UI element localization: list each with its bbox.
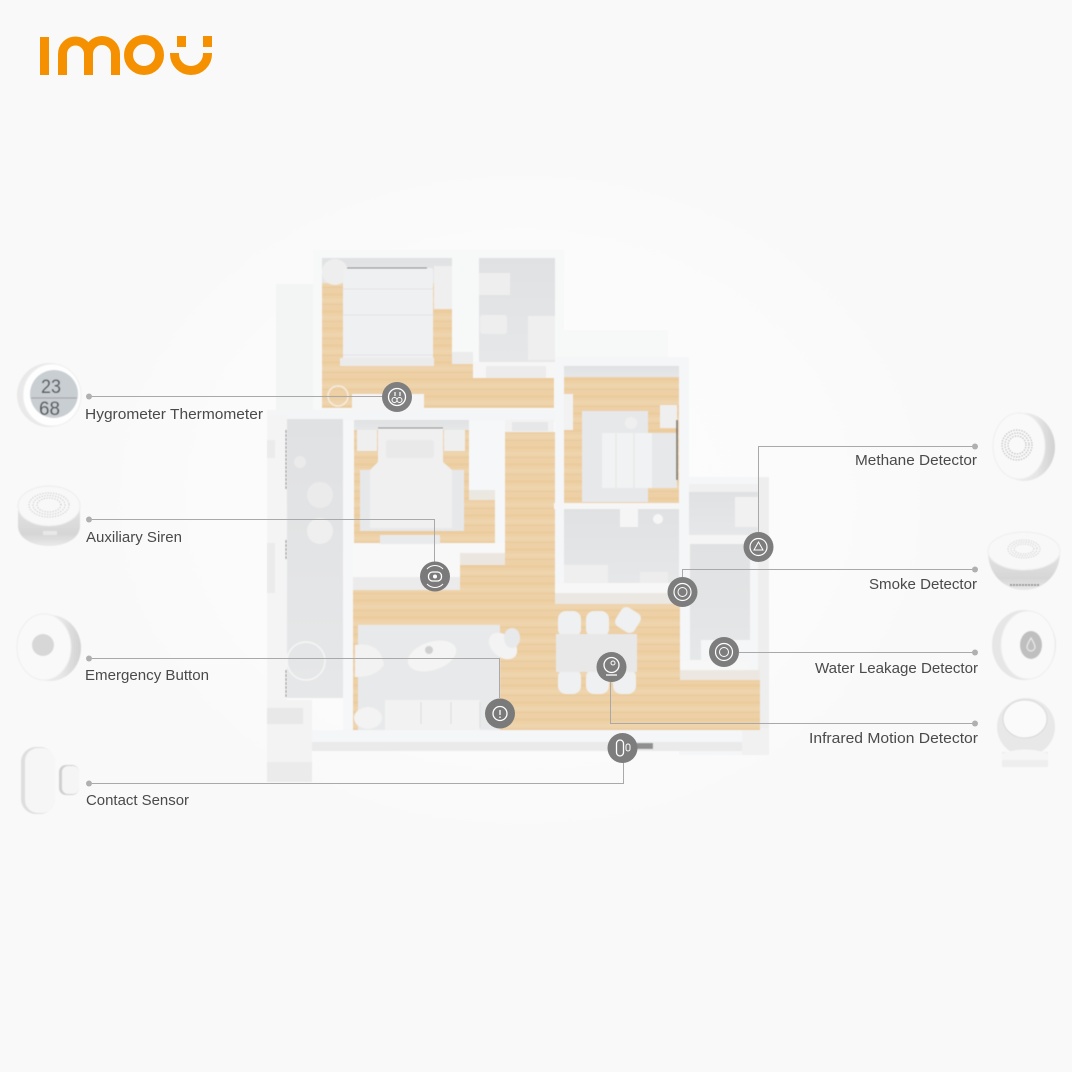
- map marker: infrared motion detector: [596, 652, 626, 682]
- temperature reading: 23: [41, 377, 61, 398]
- map marker: contact sensor: [608, 733, 638, 763]
- map marker: methane detector: [744, 532, 774, 562]
- label: methane detector: Methane Detector: [855, 452, 977, 469]
- map marker: smoke detector: [668, 577, 698, 607]
- gray rooms: [287, 258, 758, 698]
- label: infrared motion detector: Infrared Motion Detector: [809, 730, 978, 747]
- walls and structure: [267, 250, 769, 782]
- device: auxiliary siren: [18, 486, 80, 546]
- label: hygrometer thermometer: Hygrometer Thermometer: [85, 406, 263, 423]
- connector end dots: [86, 394, 978, 786]
- dining table and chairs: [556, 605, 643, 694]
- device: smoke detector: [988, 532, 1060, 590]
- living room furniture: [354, 625, 522, 730]
- device: methane detector: [993, 413, 1055, 481]
- logo: imou: [44, 36, 208, 75]
- connector lines: [88, 396, 975, 784]
- map marker: hygrometer thermometer: [382, 382, 412, 412]
- bedroom three furniture: [564, 394, 677, 502]
- room shading and counters: [352, 316, 760, 680]
- label: emergency button: Emergency Button: [85, 667, 209, 684]
- label: auxiliary siren: Auxiliary Siren: [86, 529, 182, 546]
- floor plan: [267, 250, 769, 782]
- bedroom two furniture: [357, 428, 465, 531]
- humidity reading: 68: [39, 399, 60, 420]
- device: water leakage detector: [992, 610, 1056, 680]
- map marker: auxiliary siren: [420, 562, 450, 592]
- label: water leakage detector: Water Leakage Detector: [815, 660, 978, 677]
- balcony items: [286, 430, 333, 698]
- device: hygrometer thermometer: [17, 363, 81, 427]
- label: contact sensor: Contact Sensor: [86, 792, 189, 809]
- device: contact sensor: [21, 747, 79, 814]
- device: emergency button: [17, 614, 81, 681]
- wood floors: [322, 283, 760, 730]
- map marker: water leakage detector: [709, 637, 739, 667]
- bedroom one furniture: [322, 259, 510, 406]
- map marker: emergency button: [485, 698, 515, 728]
- device: infrared motion detector: [997, 698, 1055, 767]
- label: smoke detector: Smoke Detector: [869, 576, 977, 593]
